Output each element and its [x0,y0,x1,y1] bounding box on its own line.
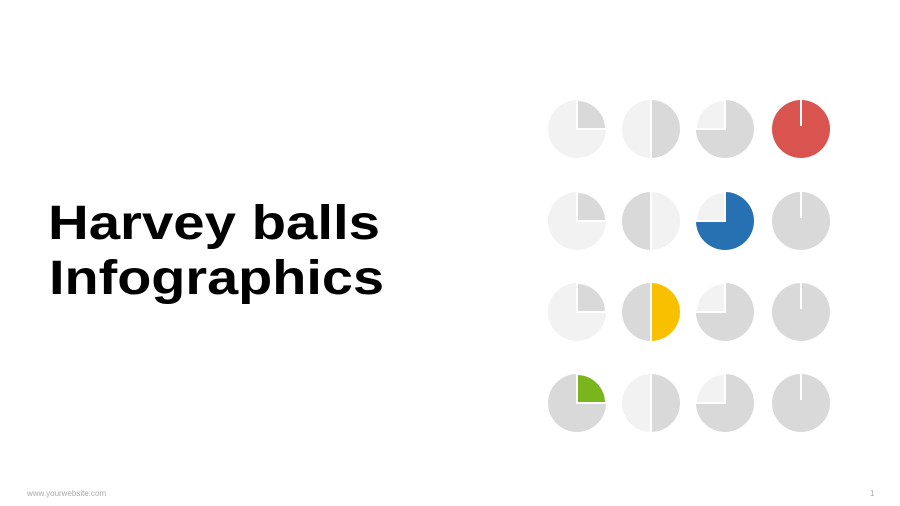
title: Harvey balls [48,197,380,250]
title [48,197,384,305]
footer: website: www.yourwebsite.com [27,489,106,498]
row 1 [548,99,830,159]
title: Infographics [49,252,384,305]
row 4 [548,373,830,433]
row 3 [548,282,830,342]
row 2 [548,191,830,251]
footer: page number: 1 [870,489,874,498]
